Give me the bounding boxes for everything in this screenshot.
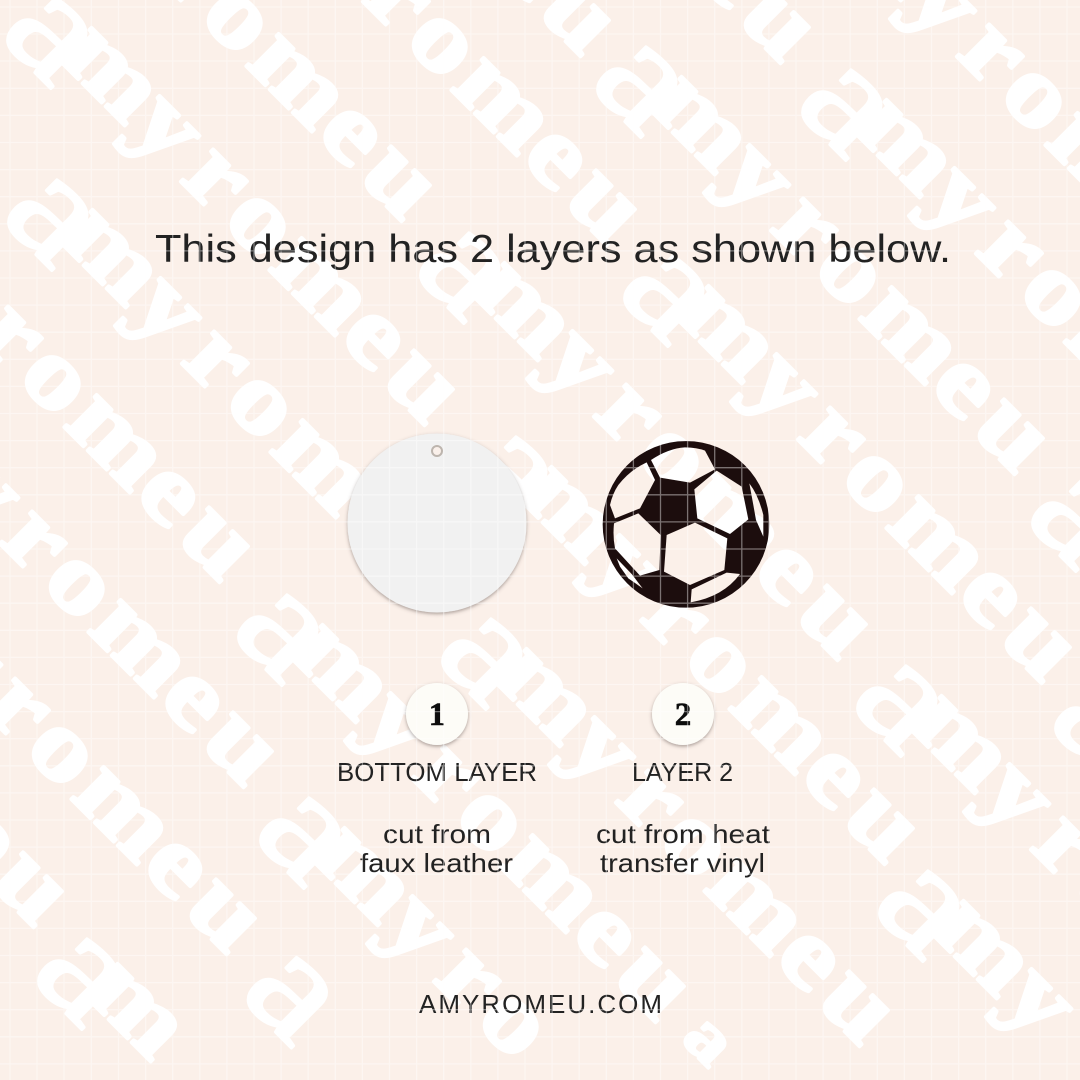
badge 1 [406,683,468,745]
watermark pattern: repeated amyromeu: a [5,882,177,1054]
description: layer 2 material [596,819,771,878]
watermark pattern: repeated amyromeu: myromeu [501,434,950,882]
description: layer 1 material: cut from [383,819,491,849]
website: AMYROMEU.COM [419,989,662,1019]
watermark pattern: repeated amyromeu: a [409,562,581,734]
layer 1: blank round faux leather shape [348,434,526,612]
badge 2: 2 [675,697,691,733]
description: layer 1 material [360,819,513,878]
title: This design has 2 layers as shown below. [155,228,951,271]
watermark pattern: repeated amyromeu: a [205,538,377,710]
watermark pattern: repeated amyromeu: a [591,199,763,371]
watermark pattern: repeated amyromeu: a [846,814,1018,986]
watermark pattern: repeated amyromeu: myro [294,795,578,1079]
description: layer 2 material: transfer vinyl [600,848,765,878]
layer 2: soccer ball vinyl cut [603,441,769,608]
watermark pattern: repeated amyromeu: a [824,609,996,781]
label: bottom layer: BOTTOM LAYER [337,757,537,787]
watermark pattern: repeated amyromeu: myromeu [272,592,721,1040]
watermark pattern: repeated amyromeu: a [227,741,399,913]
watermark pattern: repeated amyromeu: a [214,901,386,1073]
description: layer 2 material: cut from heat [596,819,771,849]
badge 1: 1 [429,697,445,733]
watermark pattern: repeated amyromeu: myromeu [631,44,1080,492]
badge 2 [652,683,714,745]
description: layer 1 material: faux leather [360,848,513,878]
watermark pattern: repeated amyromeu: myromeu [42,177,491,625]
watermark pattern: repeated amyromeu: a [769,13,941,185]
watermark pattern: repeated amyromeu: a [387,176,559,348]
watermark pattern: repeated amyromeu: a [669,996,752,1080]
watermark pattern: repeated amyromeu: m [67,931,215,1079]
watermark pattern: repeated amyromeu: myromeu [454,230,903,678]
watermark pattern: repeated amyromeu: myromeu [476,616,925,1064]
watermark pattern: repeated amyromeu: myromeu [41,0,490,443]
label: layer 2: LAYER 2 [632,757,733,787]
watermark pattern: repeated amyromeu: a [434,380,606,552]
icon: keyring hole [432,446,442,456]
